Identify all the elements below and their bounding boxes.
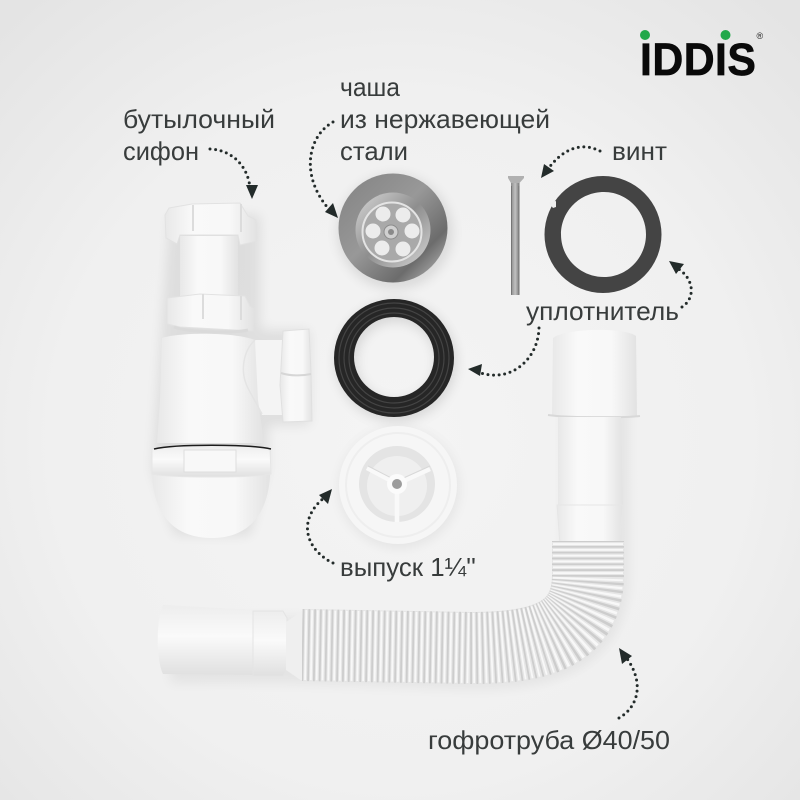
outlet inner cup [359, 446, 435, 522]
steel flange [338, 174, 448, 282]
siphon middle nut [167, 294, 254, 331]
black stepped gasket [334, 299, 454, 417]
arrow: to flat gasket [669, 261, 691, 307]
white outlet [339, 426, 459, 548]
screw [508, 176, 524, 295]
pipe straight section [558, 417, 623, 510]
pipe corrugated hose [302, 541, 588, 648]
label: чаша из нержавеющей стали [340, 72, 550, 166]
logo: IDDIS: ® [756, 31, 764, 41]
siphon side tube [244, 340, 283, 415]
label: чаша из нержавеющей стали: стали [340, 136, 408, 166]
arrow: to outlet [307, 489, 333, 563]
label: уплотнитель: уплотнитель [526, 296, 679, 326]
strainer holes [366, 206, 420, 256]
pipe collar [557, 505, 623, 545]
steel bowl strainer [338, 174, 452, 289]
siphon top nut [165, 203, 257, 245]
outlet flange [339, 426, 457, 544]
steel basket [356, 192, 430, 268]
label: бутылочный сифон: сифон [123, 136, 199, 166]
arrow: to steel bowl [310, 122, 338, 218]
flat rubber gasket [544, 176, 662, 293]
label: выпуск 1¼: выпуск 1¼'' [340, 552, 476, 582]
label: чаша из нержавеющей стали: из нержавеющей [340, 104, 550, 134]
corrugated pipe [158, 330, 640, 681]
bottle siphon [151, 203, 312, 538]
outlet spokes [367, 468, 430, 522]
logo: IDDIS: IDDIS [640, 35, 756, 85]
label: чаша из нержавеющей стали: чаша [340, 72, 401, 102]
pipe left cup [158, 605, 260, 675]
siphon body [157, 334, 264, 443]
label: гофротруба Ø40/50: гофротруба Ø40/50 [428, 725, 670, 755]
label: бутылочный сифон: бутылочный [123, 104, 275, 134]
arrow: to siphon [210, 149, 258, 199]
siphon upper tube [180, 236, 238, 298]
pipe upper cup [552, 330, 637, 416]
label: винт: винт [612, 136, 667, 166]
arrow: to black gasket [468, 328, 539, 376]
siphon side nut [280, 329, 312, 422]
siphon bowl [151, 451, 271, 538]
siphon bowl ring [152, 445, 271, 477]
arrow: to screw [541, 147, 600, 178]
label: бутылочный сифон [123, 104, 275, 166]
arrow: to corrugated pipe [619, 648, 637, 718]
